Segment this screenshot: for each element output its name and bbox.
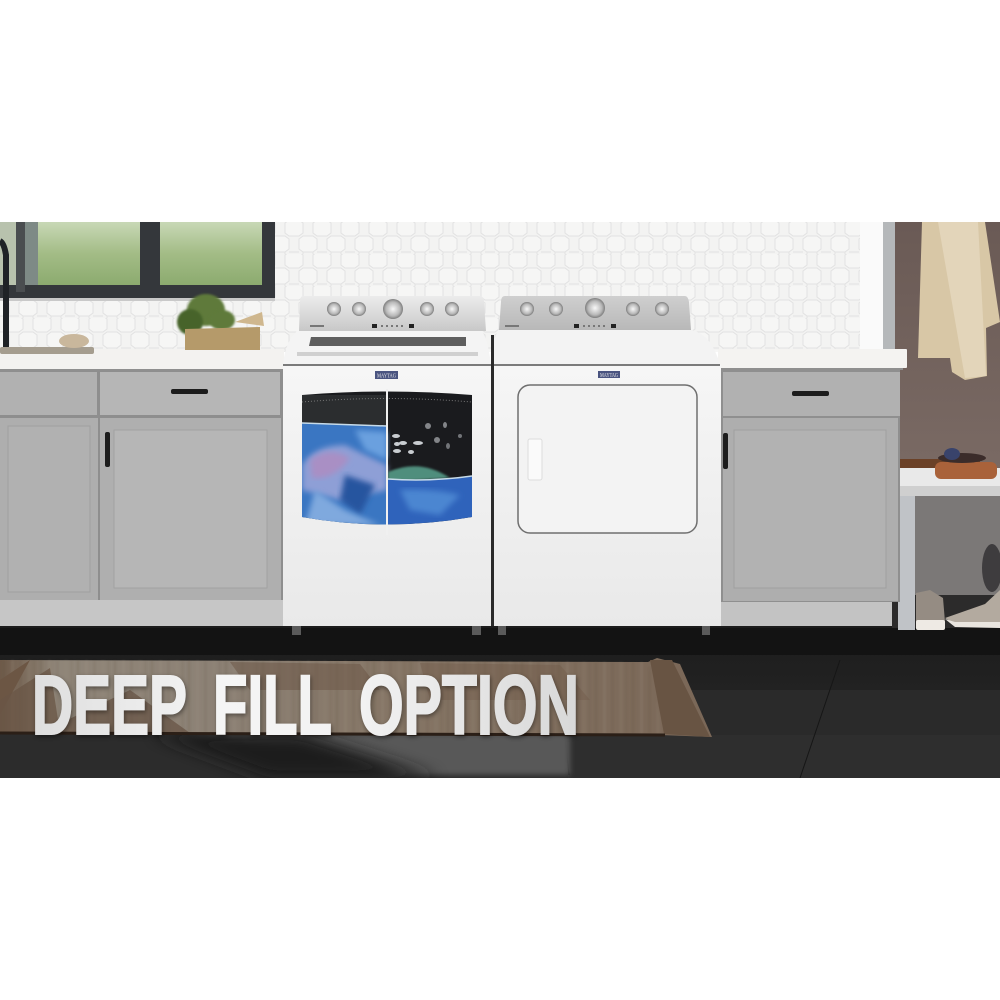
- washer drum cutaway: [302, 392, 472, 524]
- washer logo: MAYTAG: [377, 374, 396, 380]
- tiled wall: [0, 222, 880, 352]
- washer logo: [375, 371, 398, 380]
- washer feet: [292, 626, 481, 635]
- title: DEEP: [32, 658, 187, 752]
- floor light patch: [200, 736, 572, 778]
- dryer control knobs: [505, 298, 669, 328]
- left half: deep water laundry: [302, 424, 386, 524]
- right wall and coat area: [860, 222, 1000, 628]
- dryer logo: MAYTAG: [600, 373, 618, 379]
- dryer top: [494, 330, 720, 365]
- shoes: [916, 544, 1000, 630]
- hanging coat: [918, 222, 1000, 380]
- right half: bubbles, green cloth, shallow water: [392, 422, 462, 454]
- right counter: [718, 349, 907, 370]
- dryer logo: [598, 371, 620, 378]
- washer lid window: [309, 337, 466, 346]
- dryer feet: [498, 626, 710, 635]
- dryer: [494, 296, 721, 635]
- rug: [0, 658, 712, 737]
- title: OPTION: [359, 658, 579, 752]
- drum divider line: [386, 389, 388, 535]
- laundry room scene infographic: [0, 222, 1000, 778]
- left counter with sink: [0, 334, 284, 371]
- dryer door handle: [528, 439, 542, 480]
- dryer console: [499, 296, 691, 330]
- window: [0, 222, 275, 301]
- plant in basket: [177, 294, 264, 350]
- bench: [898, 468, 1000, 630]
- floor: [0, 626, 1000, 778]
- washer control knobs: [310, 299, 459, 328]
- belt and items on bench: [900, 448, 997, 479]
- title: [32, 658, 579, 752]
- washer console: [299, 296, 486, 331]
- title: FILL: [213, 658, 332, 752]
- left cabinets: [0, 371, 284, 626]
- dryer body: [494, 365, 721, 626]
- gap between appliances: [491, 335, 494, 626]
- photo scene: [0, 222, 1000, 778]
- washer: [283, 296, 491, 635]
- washer lid: [283, 331, 491, 365]
- dryer door: [518, 385, 697, 533]
- right cabinets: [720, 370, 900, 626]
- faucet: [0, 241, 6, 348]
- washer body: [283, 365, 491, 626]
